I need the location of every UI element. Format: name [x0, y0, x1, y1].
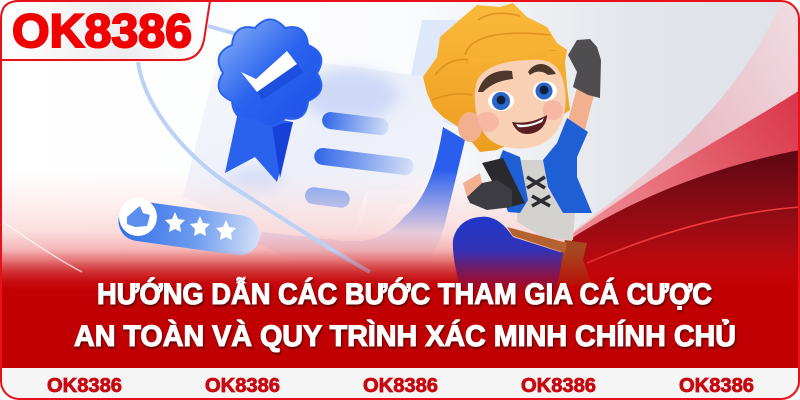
character face: [475, 60, 566, 149]
character arm skin: [463, 173, 482, 197]
bottom red gradient: [2, 173, 572, 294]
badge seal: [219, 20, 321, 126]
character raised arm: [568, 89, 594, 130]
title: [74, 277, 736, 353]
character eyes: [488, 81, 557, 111]
footer strip: [0, 368, 800, 400]
footer strip: OK8386: [363, 375, 438, 397]
character legs: [453, 217, 563, 296]
rating stars: [165, 212, 236, 240]
character ear: [458, 112, 482, 142]
icon: thumbs up: [119, 198, 157, 236]
character shirt: [517, 160, 575, 240]
title: HƯỚNG DẪN CÁC BƯỚC THAM GIA CÁ CƯỢC: [97, 277, 712, 311]
character glove fist: [568, 39, 601, 98]
footer strip: OK8386: [679, 375, 754, 397]
character: boy with phone: [423, 3, 601, 296]
footer strip: OK8386: [205, 375, 280, 397]
badge ribbon: [225, 112, 293, 182]
lower red fade: [0, 250, 800, 368]
character phone: [482, 158, 525, 208]
logo badge: OK8386: [12, 4, 192, 57]
character hair back: [423, 3, 570, 152]
character jacket right: [543, 118, 592, 213]
character glove hand: [467, 180, 512, 210]
rating pill: [116, 198, 262, 258]
icon: check mark: [241, 51, 297, 92]
title: AN TOÀN VÀ QUY TRÌNH XÁC MINH CHÍNH CHỦ: [74, 319, 736, 353]
document text bars: [304, 111, 415, 209]
footer strip: OK8386: [521, 375, 596, 397]
character belt: [507, 227, 567, 253]
character sack: [558, 240, 591, 285]
document page: [184, 63, 444, 206]
character hair strands: [432, 13, 566, 100]
footer strip: OK8386: [47, 375, 122, 397]
character mouth: [512, 115, 547, 134]
document page curl: [350, 172, 430, 240]
right decorative swoosh bands: [572, 0, 800, 400]
character jacket left: [499, 150, 528, 213]
thin blue arc: [138, 26, 370, 272]
document illustration: [184, 20, 465, 250]
character eyebrows: [478, 71, 513, 92]
character laces: [527, 177, 550, 206]
character hair fringe: [467, 49, 567, 63]
document rear panel: [411, 20, 460, 127]
icon: certificate badge with ribbon: [219, 20, 321, 182]
document blue curled back: [258, 127, 465, 250]
